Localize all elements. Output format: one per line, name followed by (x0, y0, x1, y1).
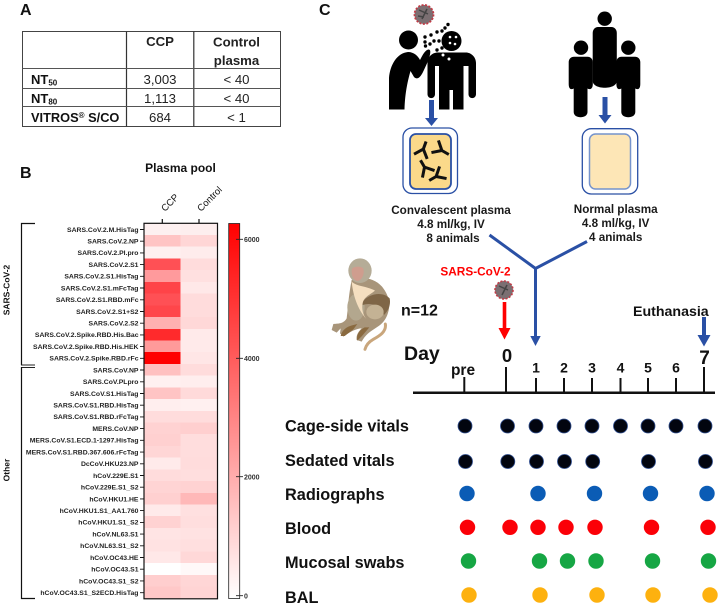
heatmap row labels: SARS.CoV.2.NP (87, 238, 139, 246)
timeline axis: 7 (699, 348, 710, 369)
heatmap row labels: hCoV.HKU1.HE (89, 496, 139, 503)
table: antibody titers: 50 (48, 78, 58, 88)
table: antibody titers: NT (31, 91, 48, 106)
heatmap row labels: MERS.CoV.S1.ECD.1-1297.HisTag (30, 438, 138, 445)
arrow: virus challenge on day 0 (498, 302, 510, 340)
group bracket: Other: Other (2, 458, 12, 481)
heatmap row labels: SARS.CoV.2.S2 (89, 320, 139, 328)
table: antibody titers: 80 (48, 98, 58, 106)
row: sedated vitals: Sedated vitals (285, 452, 394, 470)
icon: group of three people (569, 12, 640, 117)
heatmap row labels: SARS.CoV.2.S1.HisTag (64, 274, 138, 281)
heatmap row labels: SARS.CoV.2.S1 (89, 262, 139, 269)
colour scale legend: 6000 (244, 237, 260, 244)
icon: rhesus macaque (332, 258, 390, 349)
heatmap row labels: hCoV.229E.S1 (93, 473, 139, 480)
heatmap row labels: hCoV.OC43.S1_S2 (79, 578, 139, 585)
row: BAL (285, 587, 718, 606)
row: cage-side vitals: Cage-side vitals (285, 418, 409, 436)
row: radiographs (285, 486, 715, 504)
timeline axis: 3 (588, 360, 596, 376)
icon: convalescent plasma bag with antibodies (403, 128, 458, 194)
table: antibody titers: 684 (149, 110, 171, 125)
row: blood (285, 520, 716, 538)
heatmap row labels: SARS.CoV.NP (93, 367, 139, 374)
table: antibody titers: Control (213, 34, 260, 50)
icon: coronavirus, challenge (495, 281, 513, 299)
heatmap row labels: DcCoV.HKU23.NP (81, 461, 139, 468)
table: antibody titers: 3,003 (143, 72, 177, 87)
table: antibody titers: 1,113 (144, 91, 176, 106)
heatmap row labels: hCoV.OC43.S1 (91, 567, 139, 574)
normal plasma label: Normal plasma (574, 203, 658, 216)
icon: person exposed (428, 31, 476, 110)
panel label A: A (20, 2, 32, 19)
table: antibody titers: S/CO (85, 110, 119, 125)
heatmap column labels: Control (195, 185, 225, 214)
heatmap row labels: SARS.CoV.2.Spike.RBD.rFc (49, 356, 139, 363)
heatmap row labels: hCoV.229E.S1_S2 (81, 484, 139, 492)
timeline axis (404, 343, 715, 393)
normal plasma label (574, 203, 658, 244)
SARS-CoV-2 challenge label: SARS-CoV-2 (440, 264, 511, 278)
panel label C: C (319, 2, 331, 19)
panel label B: B (20, 165, 32, 182)
heatmap row labels: hCoV.NL63.S1 (92, 531, 139, 538)
timeline axis: 6 (672, 360, 680, 376)
timeline axis: pre (451, 362, 475, 379)
timeline axis: 4 (617, 360, 625, 376)
row: sedated vitals (285, 452, 712, 470)
row: blood: Blood (285, 520, 331, 538)
heatmap row labels: SARS.CoV.2.PI.pro (78, 250, 138, 257)
row: mucosal swabs (285, 553, 716, 572)
heatmap row labels: SARS.CoV.S1.RBD.HisTag (53, 402, 138, 410)
timeline axis: 1 (532, 360, 540, 376)
group bracket: SARS-CoV-2 (2, 224, 35, 368)
heatmap row labels: hCoV.OC43.HE (90, 555, 139, 562)
arrow: group to normal plasma (598, 97, 612, 124)
heatmap row labels: SARS.CoV.2.S1.mFcTag (61, 285, 138, 292)
convalescent plasma label: 4.8 ml/kg, IV (417, 218, 485, 231)
Euthanasia label: Euthanasia (633, 304, 709, 320)
convalescent plasma label (391, 204, 511, 245)
heatmap row labels: SARS.CoV.2.S1.RBD.mFc (56, 297, 139, 304)
timeline axis: 0 (502, 345, 512, 366)
table: antibody titers (22, 32, 280, 126)
row: radiographs: Radiographs (285, 486, 385, 504)
heatmap row labels: hCoV.OC43.S1_S2ECD.HisTag (40, 590, 138, 597)
convalescent plasma label: 8 animals (426, 232, 480, 245)
heatmap row labels: SARS.CoV.S1.HisTag (70, 391, 138, 398)
heatmap row labels: SARS.CoV.2.Spike.RBD.His.HEK (33, 344, 139, 351)
heatmap column labels (159, 185, 225, 214)
arrow: person to convalescent plasma (425, 100, 438, 126)
table: antibody titers: < 1 (227, 110, 246, 125)
timeline axis: Day (404, 343, 440, 365)
table: antibody titers: < 40 (223, 72, 250, 87)
arrow: euthanasia on day 7 (698, 317, 710, 346)
heatmap row labels: hCoV.HKU1.S1_S2 (78, 520, 139, 527)
icon: normal plasma bag (582, 129, 638, 194)
heatmap column labels: CCP (159, 192, 181, 214)
timeline axis: 5 (644, 360, 652, 376)
table: antibody titers: < 40 (223, 91, 250, 106)
colour scale legend: 2000 (244, 474, 260, 482)
heatmap cells (144, 223, 217, 599)
heatmap row labels: SARS.CoV.S1.RBD.rFcTag (53, 414, 138, 421)
heatmap row labels: hCoV.HKU1.S1_AA1.760 (60, 508, 139, 515)
group bracket: SARS-CoV-2: SARS-CoV-2 (2, 264, 12, 315)
table: antibody titers: VITROS (31, 110, 79, 125)
colour scale legend: 0 (244, 594, 248, 600)
icon: person coughing (389, 30, 430, 110)
Y connector and arrow: plasma infusion on day 1 (490, 235, 587, 346)
table: antibody titers: ® (79, 111, 85, 120)
table: antibody titers: plasma (214, 53, 260, 68)
heatmap row labels: hCoV.NL63.S1_S2 (80, 543, 139, 550)
heatmap row labels: MERS.CoV.S1.RBD.367.606.rFcTag (26, 449, 138, 456)
colour scale legend (229, 224, 260, 600)
timeline axis: 2 (560, 360, 568, 376)
table: antibody titers: NT (31, 72, 48, 87)
heatmap row labels: SARS.CoV.2.S1+S2 (76, 309, 139, 316)
heatmap row labels: MERS.CoV.NP (92, 426, 139, 433)
group bracket: Other (2, 367, 35, 598)
heatmap row labels: SARS.CoV.2.Spike.RBD.His.Bac (35, 332, 139, 339)
normal plasma label: 4.8 ml/kg, IV (582, 217, 650, 230)
heatmap frame and ticks (140, 219, 218, 599)
icon: coronavirus, top (414, 5, 434, 24)
icon: droplets (423, 23, 450, 52)
colour scale legend: 4000 (244, 356, 260, 363)
row: cage-side vitals (285, 418, 712, 436)
normal plasma label: 4 animals (589, 231, 643, 244)
table: antibody titers: CCP (146, 34, 174, 49)
heatmap heading: Plasma pool (145, 161, 216, 175)
heatmap row labels: SARS.CoV.PLpro (83, 379, 138, 386)
row: mucosal swabs: Mucosal swabs (285, 554, 404, 572)
heatmap row labels (26, 227, 139, 597)
heatmap row labels: SARS.CoV.2.M.HisTag (67, 227, 138, 234)
n=12 label: n=12 (401, 302, 438, 320)
convalescent plasma label: Convalescent plasma (391, 204, 511, 217)
